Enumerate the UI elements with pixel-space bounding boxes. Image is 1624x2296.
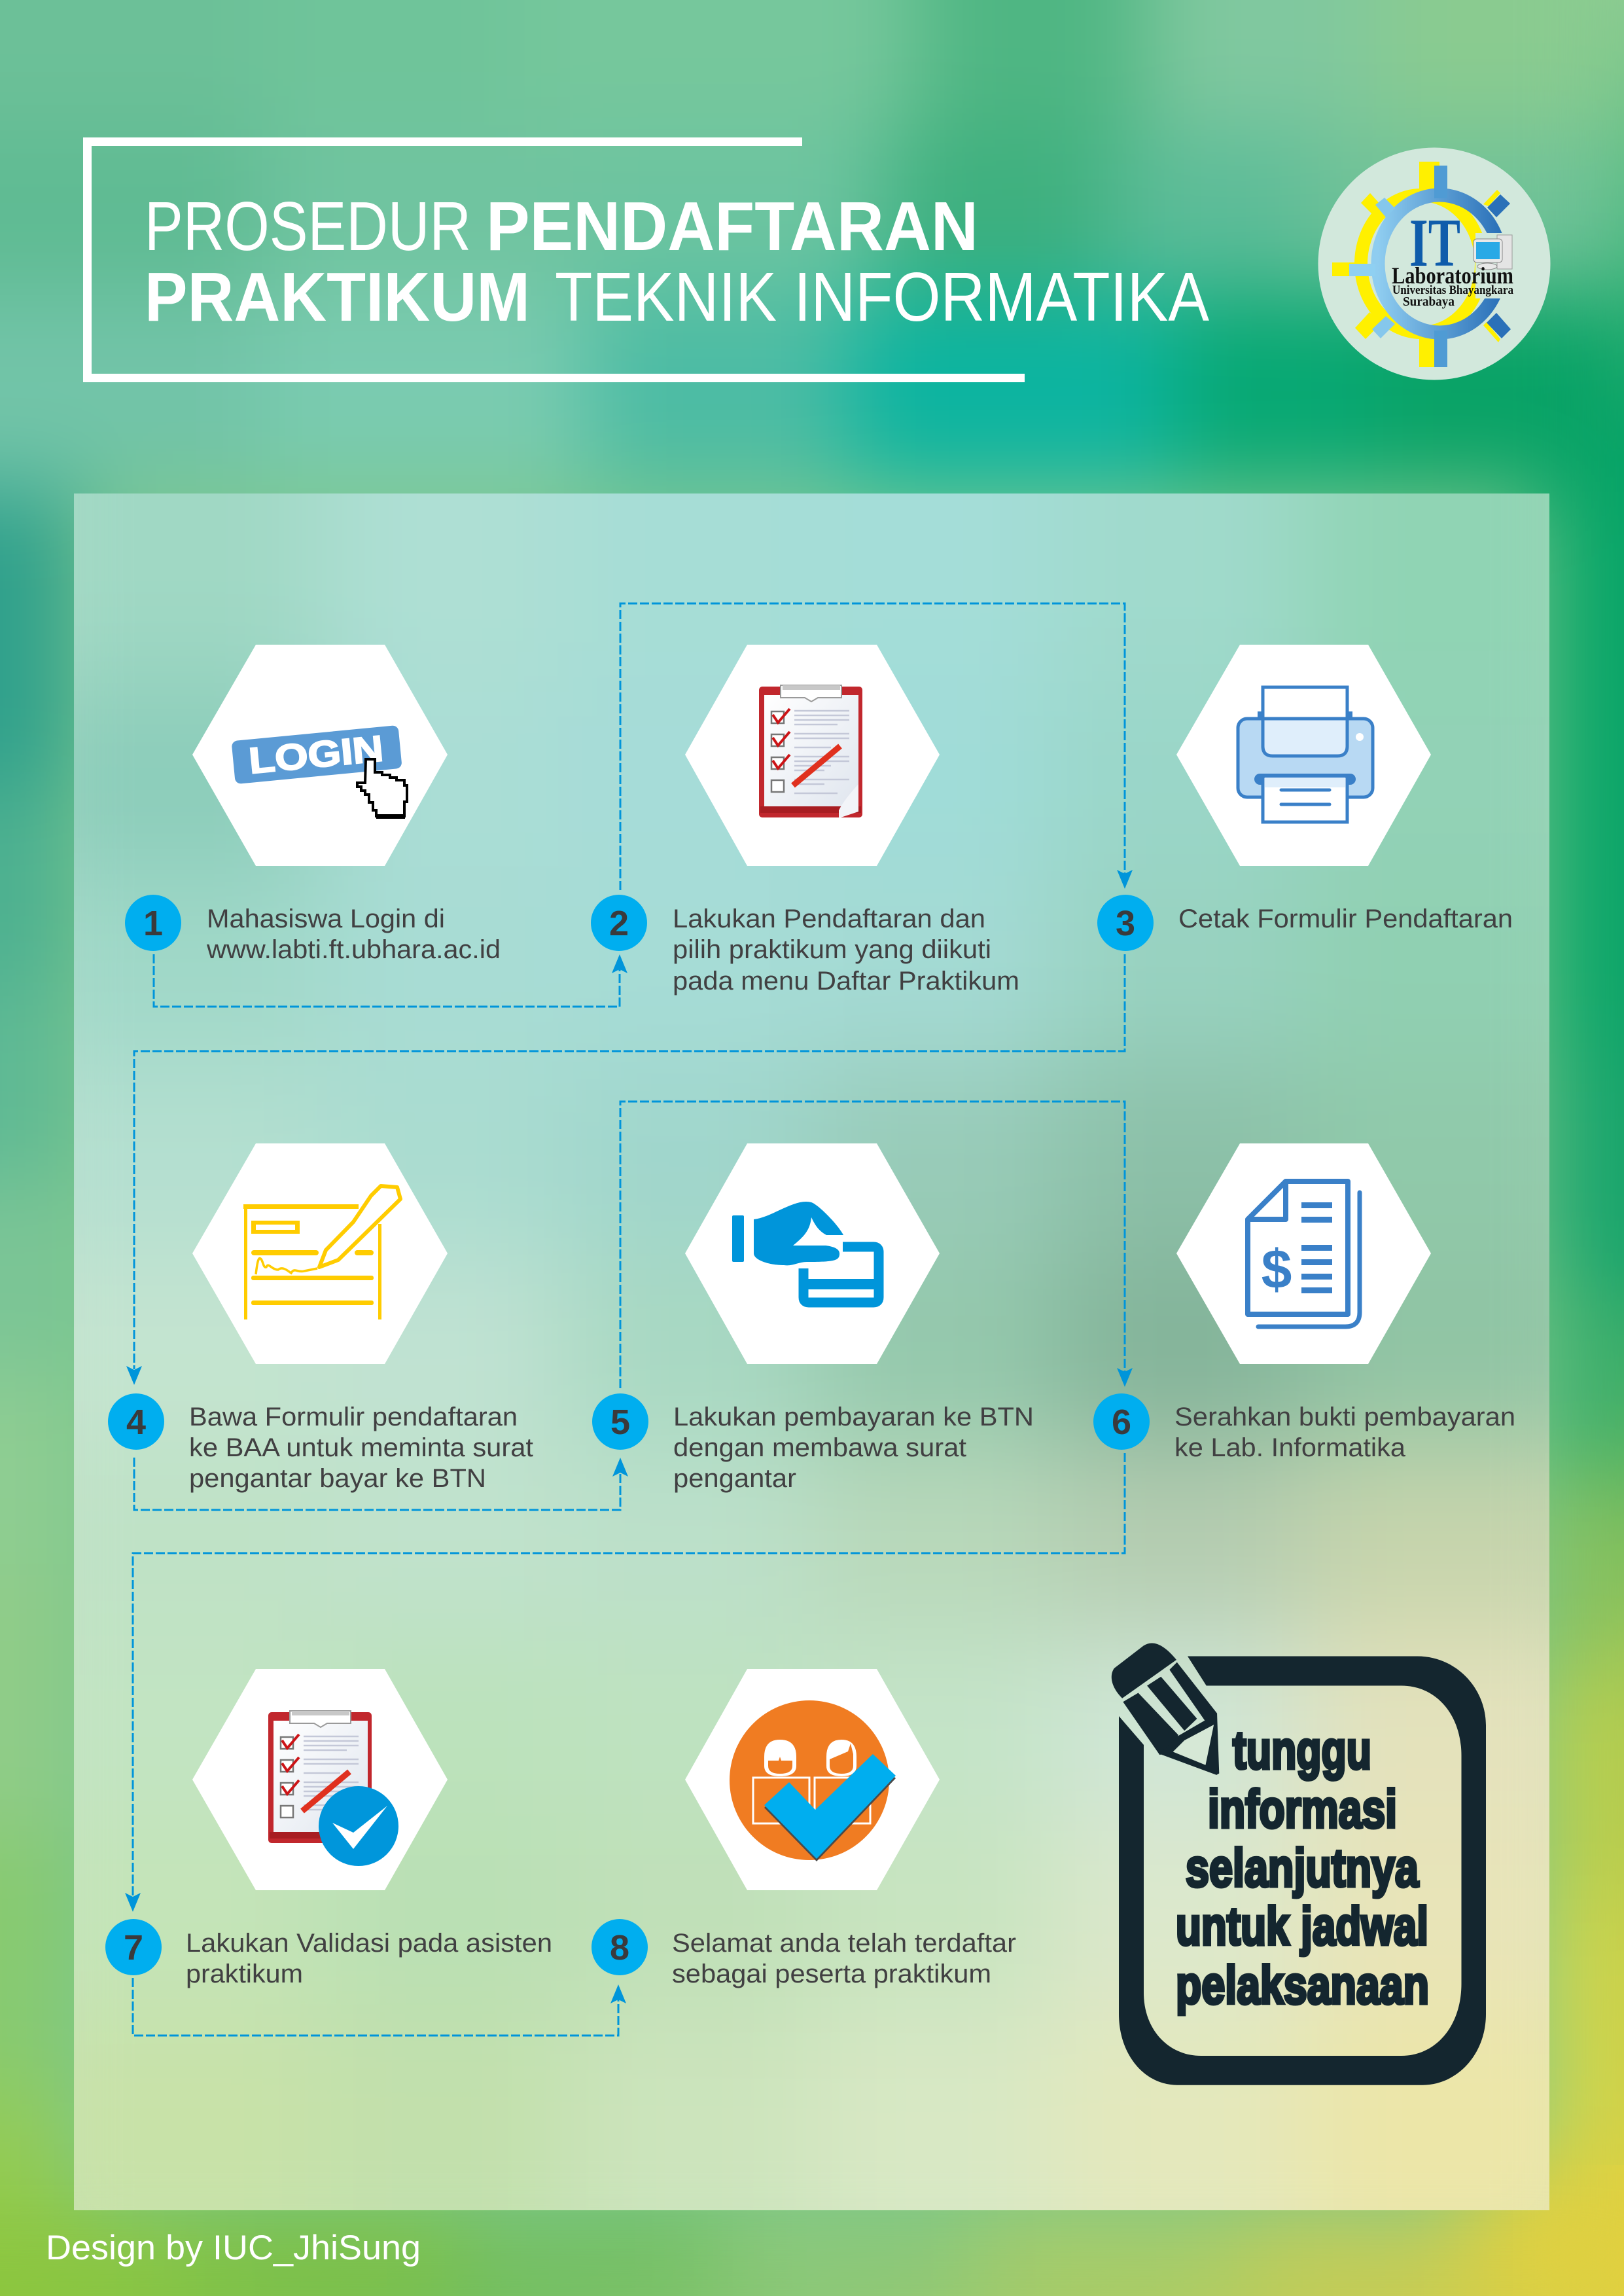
connector: step 4 to step 5 [134, 1458, 628, 1510]
footer credit: Design by IUC_JhiSung [46, 2229, 421, 2267]
connector: step 7 to step 8 [133, 1978, 626, 2036]
step 6: ke Lab. Informatika [1174, 1433, 1406, 1462]
callout text: informasi [1208, 1780, 1397, 1839]
step 5: Lakukan pembayaran ke BTN [673, 1403, 1034, 1431]
title [145, 188, 1209, 336]
step 1: www.labti.ft.ubhara.ac.id [206, 935, 501, 964]
callout text: tunggu [1233, 1721, 1371, 1780]
step 4: 4 [126, 1403, 146, 1442]
step 3: 3 [1116, 904, 1135, 943]
step 3 [1097, 895, 1513, 951]
step 7: praktikum [186, 1960, 303, 1988]
step 2 [591, 895, 1019, 996]
icon: form and pen [243, 1186, 400, 1319]
hexagon with payment icon [685, 1143, 940, 1364]
icon: login button [232, 725, 402, 784]
title: PENDAFTARAN [486, 188, 978, 265]
hexagon with signature form icon [192, 1143, 448, 1364]
step 7 [105, 1919, 552, 1988]
step 8: 8 [610, 1928, 629, 1967]
logo: IT laboratorium gear: Universitas Bhayangkara [1392, 283, 1513, 297]
logo: IT laboratorium gear [1318, 148, 1551, 380]
step 4: ke BAA untuk meminta surat [189, 1433, 533, 1462]
step 1 [125, 895, 501, 964]
connector: step 5 to step 6 [620, 1102, 1133, 1388]
step 7: 7 [124, 1928, 143, 1967]
step 8: Selamat anda telah terdaftar [672, 1929, 1016, 1958]
hexagon with registered people icon [685, 1669, 940, 1890]
step 4: Bawa Formulir pendaftaran [189, 1403, 518, 1431]
step 5: pengantar [673, 1464, 796, 1493]
rounded frame [1119, 1656, 1486, 2085]
icon: pointer hand [357, 759, 407, 819]
step 3: Cetak Formulir Pendaftaran [1178, 905, 1513, 933]
step 4: pengantar bayar ke BTN [189, 1464, 486, 1493]
step 2: 2 [609, 904, 629, 943]
title frame [83, 137, 1025, 382]
step 8 [591, 1919, 1016, 1988]
icon: hand and card [732, 1202, 879, 1302]
step 2: pilih praktikum yang diikuti [673, 935, 991, 964]
step 4 [108, 1393, 533, 1493]
connector: step 1 to step 2 [154, 954, 627, 1007]
step 7: Lakukan Validasi pada asisten [186, 1929, 552, 1958]
hexagon with invoice icon [1176, 1143, 1431, 1364]
title: PROSEDUR [145, 188, 471, 265]
callout: wait for information [1112, 1643, 1486, 2085]
panel: translucent steps area [74, 493, 1549, 2210]
callout text [1176, 1721, 1429, 2015]
icon: clipboard with check badge [268, 1711, 372, 1843]
step 1: Mahasiswa Login di [207, 905, 445, 933]
hexagon with login icon [192, 645, 448, 866]
icon: blue check badge [319, 1786, 398, 1866]
icon: orange circle with people and check [730, 1700, 896, 1861]
logo: IT laboratorium gear: Laboratorium [1392, 262, 1513, 289]
logo: IT laboratorium gear: Surabaya [1403, 295, 1455, 309]
step 1: 1 [143, 904, 163, 943]
title: TEKNIK INFORMATIKA [555, 259, 1209, 336]
logo: IT laboratorium gear: IT [1409, 204, 1460, 281]
step 2: Lakukan Pendaftaran dan [673, 905, 985, 933]
icon: clipboard checklist [759, 685, 862, 818]
step 5: 5 [610, 1403, 630, 1442]
hexagon with printer icon [1176, 645, 1431, 866]
connector: step 6 to step 7 [125, 1453, 1125, 1912]
title: PRAKTIKUM [145, 259, 530, 336]
step 5: dengan membawa surat [673, 1433, 966, 1462]
icon: invoice document [1248, 1181, 1360, 1327]
hexagon with validated clipboard icon [192, 1669, 448, 1890]
step 6: 6 [1112, 1403, 1131, 1442]
callout text: pelaksanaan [1176, 1956, 1429, 2015]
connector: step 3 to step 4 [126, 954, 1125, 1385]
step 6: Serahkan bukti pembayaran [1174, 1403, 1515, 1431]
callout text: selanjutnya [1186, 1839, 1419, 1898]
icon: login button: LOGIN [247, 727, 385, 781]
step 5 [592, 1393, 1034, 1493]
step 2: pada menu Daftar Praktikum [673, 967, 1019, 996]
step 6 [1093, 1393, 1515, 1462]
hexagon with clipboard icon [685, 645, 940, 866]
callout text: untuk jadwal [1176, 1897, 1428, 1956]
step 8: sebagai peserta praktikum [672, 1960, 991, 1988]
icon: invoice document: $ [1262, 1238, 1292, 1300]
connector: step 2 to step 3 [620, 603, 1133, 890]
icon: pencil [1112, 1643, 1219, 1775]
icon: printer [1238, 687, 1373, 822]
